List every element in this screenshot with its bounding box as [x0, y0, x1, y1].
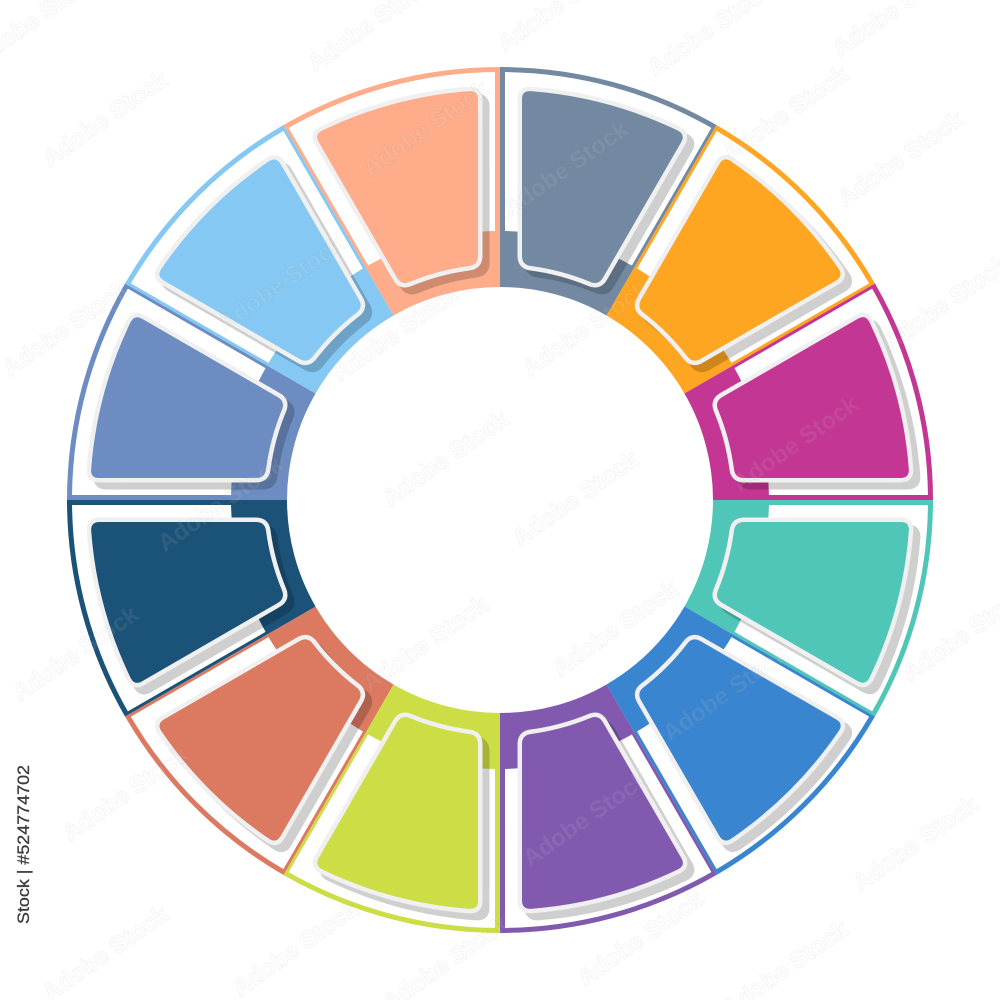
segment 11: sky blue — [125, 125, 394, 394]
segment 1: slate — [500, 67, 716, 316]
watermark: repeated stock text: Adobe Stock — [498, 115, 634, 222]
watermark: repeated stock text: Adobe Stock — [833, 105, 969, 212]
segment 9: navy — [67, 500, 316, 716]
watermark: repeated stock text: Adobe Stock — [58, 740, 194, 847]
watermark: repeated stock text: Adobe Stock — [728, 390, 864, 497]
watermark: repeated stock text: Adobe Stock — [8, 600, 144, 707]
stock id text: Stock | #524774702 — [15, 765, 33, 924]
watermark: repeated stock text: Adobe Stock — [518, 275, 654, 382]
watermark: repeated stock text: Adobe Stock — [573, 885, 709, 992]
watermark: repeated stock text: Adobe Stock — [213, 230, 349, 337]
segment 3: magenta — [684, 284, 933, 500]
segment 2: orange — [606, 125, 875, 394]
watermark: repeated stock text: Adobe Stock — [508, 445, 644, 552]
watermark: repeated stock text: Adobe Stock — [658, 640, 794, 747]
watermark: repeated stock text: Adobe Stock — [358, 590, 494, 697]
watermark: repeated stock text: Adobe Stock — [378, 405, 514, 512]
segment 6: purple — [500, 684, 716, 933]
segment 4: teal — [684, 500, 933, 716]
segment 8: salmon — [125, 606, 394, 875]
watermark: repeated stock text: Adobe Stock — [518, 765, 654, 872]
watermark: repeated stock text: Adobe Stock — [153, 450, 289, 557]
segment 10: steel blue — [67, 284, 316, 500]
watermark: repeated stock text: Adobe Stock — [38, 65, 174, 172]
segment 7: lime — [284, 684, 500, 933]
watermark: repeated stock text: Adobe Stock — [358, 75, 494, 182]
watermark: repeated stock text: Adobe Stock — [548, 575, 684, 682]
segment 5: blue — [606, 606, 875, 875]
watermark: repeated stock text: Adobe Stock — [0, 275, 134, 382]
segment 12: peach — [284, 67, 500, 316]
watermark: repeated stock text: Adobe Stock — [718, 60, 854, 167]
watermark: repeated stock text: Adobe Stock — [328, 280, 464, 387]
watermark: repeated stock text: Adobe Stock — [848, 790, 984, 897]
watermark: repeated stock text: Adobe Stock — [228, 895, 364, 1000]
